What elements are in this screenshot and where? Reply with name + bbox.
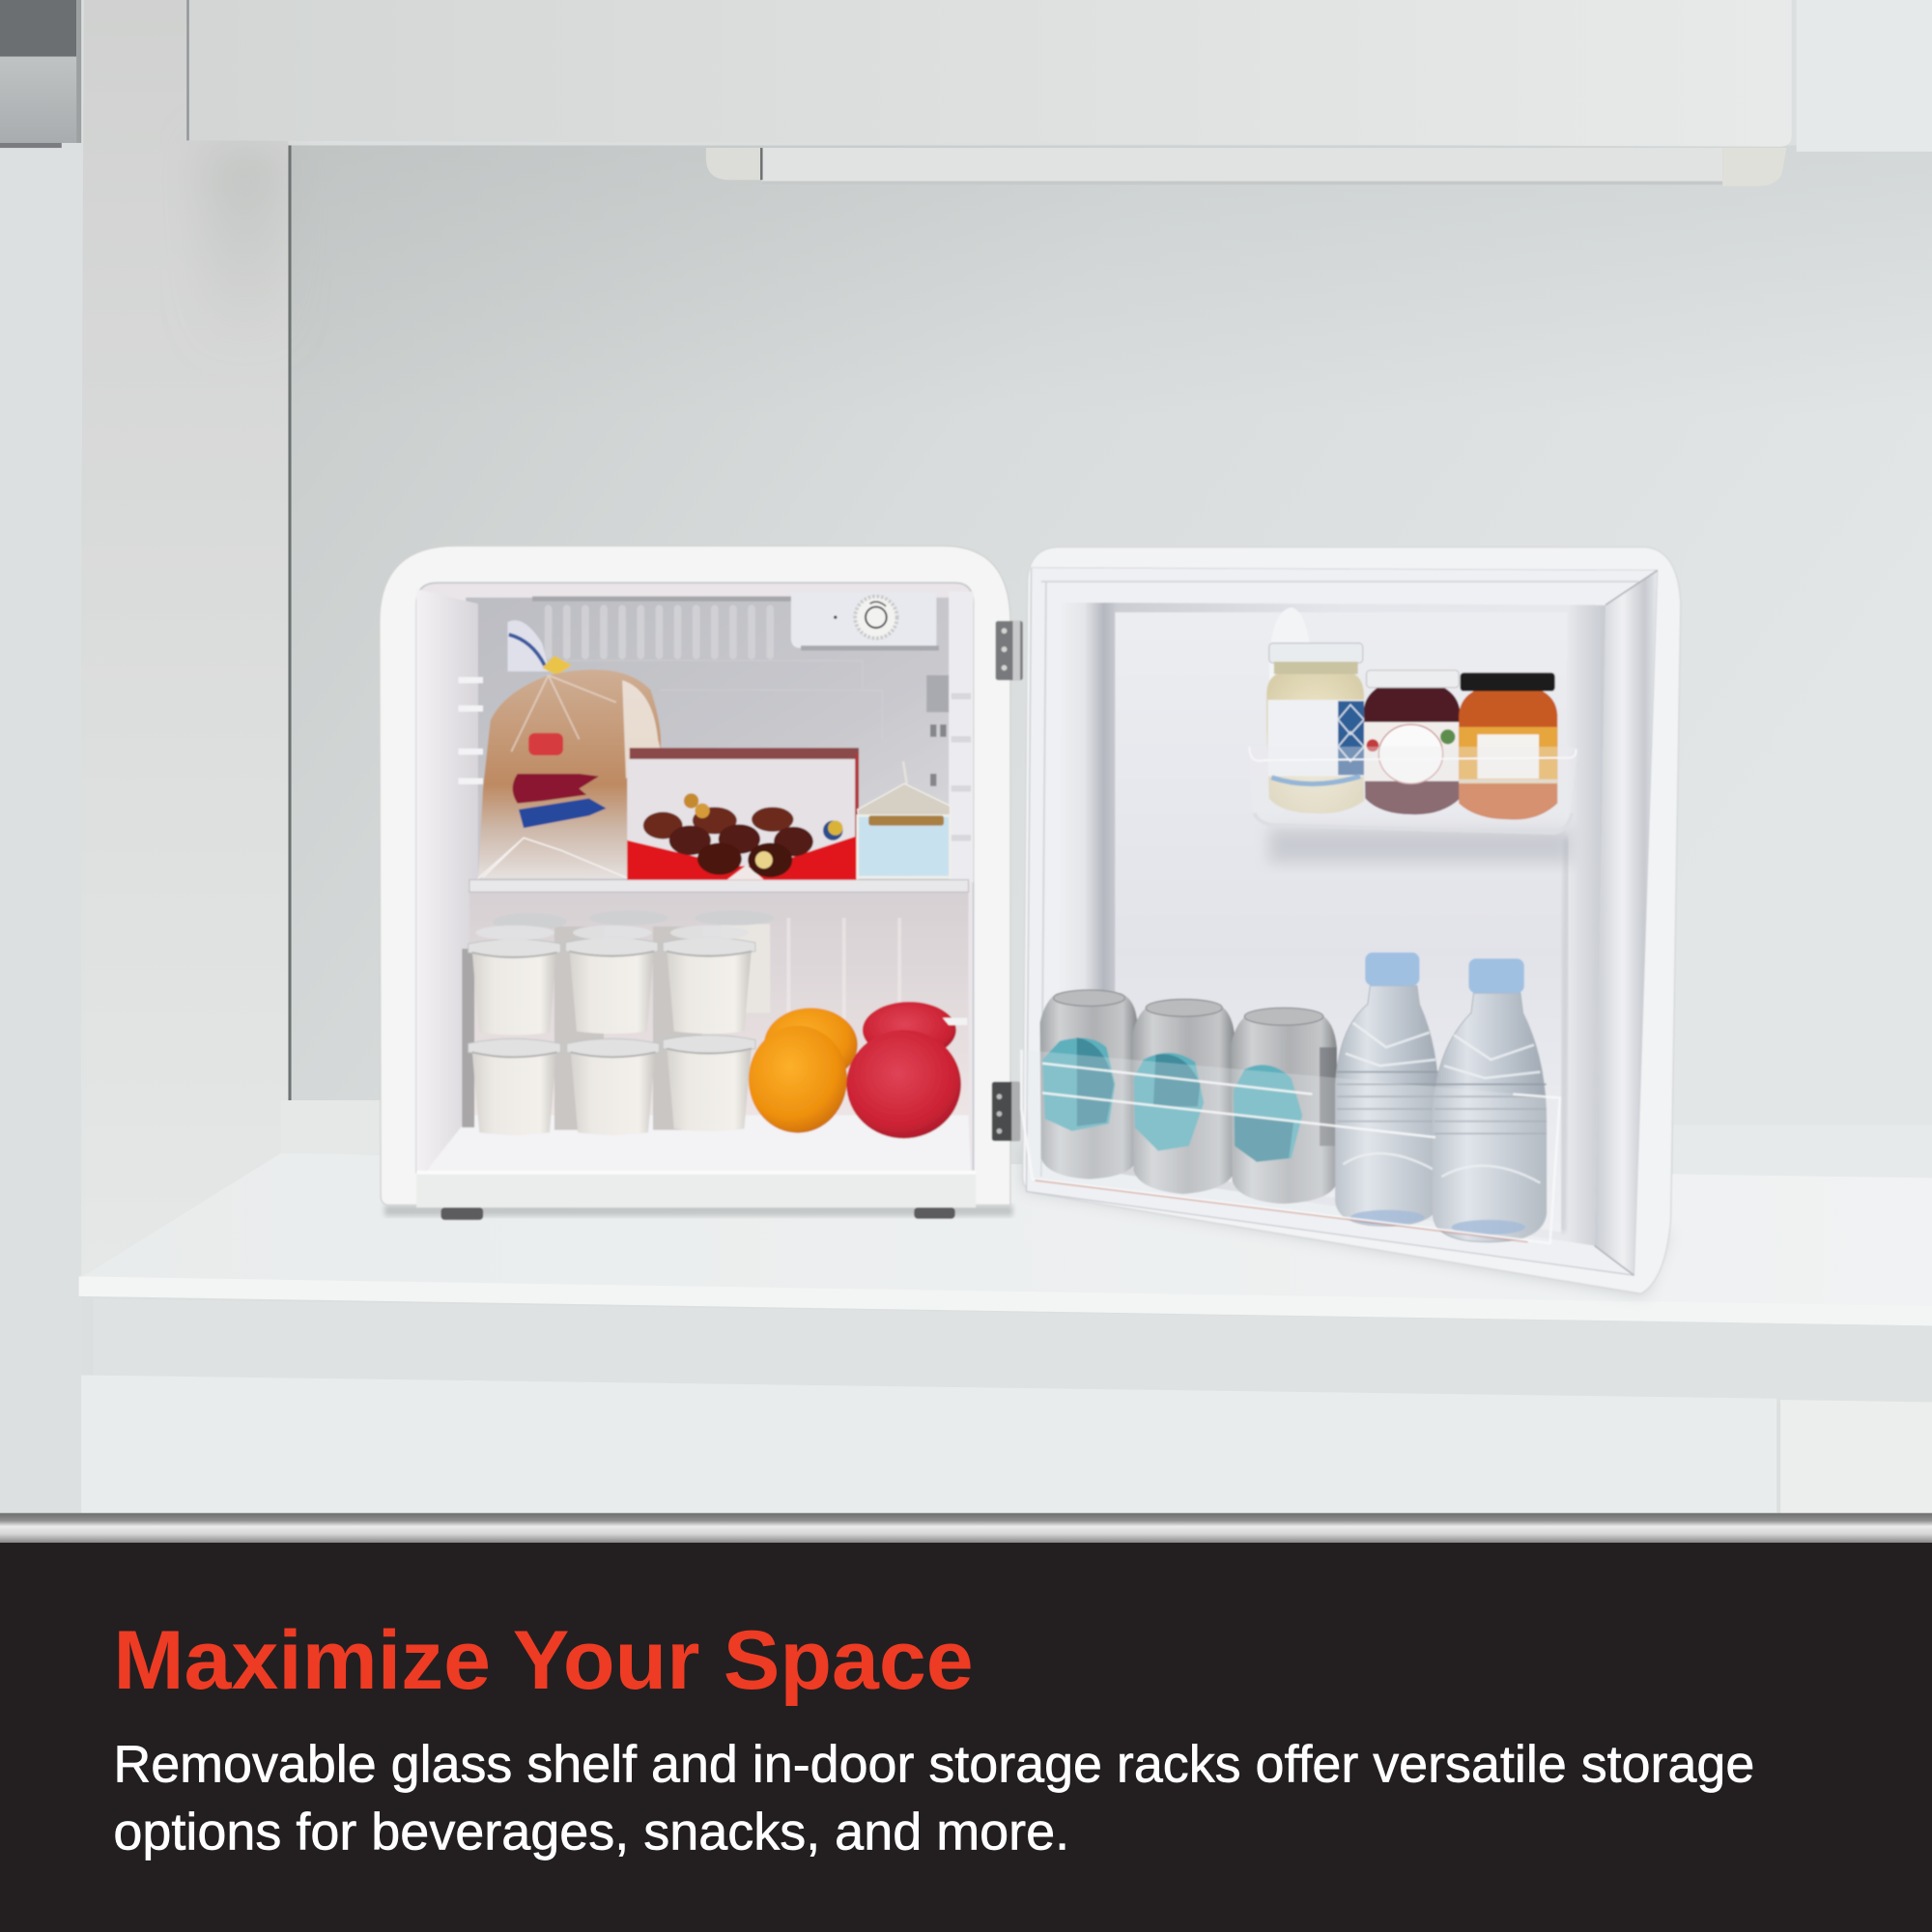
left wall xyxy=(416,589,478,1171)
inner panel right edge highlight xyxy=(1562,838,1567,1233)
oranges xyxy=(749,1008,858,1133)
backsplash ledges xyxy=(281,1100,1932,1181)
upper right wall xyxy=(926,591,974,882)
lower door rack xyxy=(1021,1050,1560,1243)
under-cabinet light xyxy=(706,148,1786,186)
soft shade on left column xyxy=(203,146,288,355)
body text xyxy=(113,1736,1754,1861)
door shell xyxy=(1023,547,1681,1293)
bread label blue xyxy=(519,799,607,828)
can 2 xyxy=(1132,999,1235,1194)
control box with thermostat dial xyxy=(791,593,939,650)
door liner xyxy=(1057,603,1605,1246)
top row xyxy=(469,939,560,1035)
bread label maroon xyxy=(513,774,599,804)
right frame band xyxy=(1595,571,1658,1275)
bread label red xyxy=(528,733,563,755)
outer shell xyxy=(380,546,1010,1205)
right upper cabinet xyxy=(1797,0,1932,152)
upper door rack xyxy=(1249,747,1577,833)
bottle 1 xyxy=(1336,952,1439,1226)
apples xyxy=(846,1002,967,1139)
top-left dark block xyxy=(0,0,81,148)
fridge body xyxy=(380,546,1023,1220)
hinges xyxy=(992,621,1023,1141)
upper cabinet xyxy=(188,0,1792,147)
fridge door xyxy=(1021,547,1681,1293)
milk carton xyxy=(858,761,950,877)
lower back panel xyxy=(469,892,969,1132)
left column xyxy=(79,0,288,1282)
can 3 xyxy=(1231,1008,1337,1204)
upper rack shadow xyxy=(1269,828,1571,863)
wall corner line xyxy=(288,146,292,1104)
upper bulge xyxy=(1269,608,1311,739)
bottom row xyxy=(469,1038,560,1135)
chocolate box xyxy=(627,748,859,880)
orange jam jar xyxy=(1459,672,1557,820)
soda cans xyxy=(1040,990,1337,1204)
evaporator ribs xyxy=(542,609,882,739)
countertop xyxy=(79,1153,1932,1309)
bottom lip xyxy=(416,1171,976,1208)
bread loaf in bag xyxy=(478,620,661,878)
metallic divider bar xyxy=(0,1513,1932,1543)
upper back panel xyxy=(466,598,958,884)
drawers xyxy=(81,1375,1932,1513)
shelf xyxy=(469,880,969,892)
yogurt cups xyxy=(462,911,774,1135)
lid domes xyxy=(475,925,750,940)
can 1 xyxy=(1040,990,1137,1179)
cabinet front xyxy=(94,1298,1932,1405)
back row cups xyxy=(462,911,774,1130)
dark caption panel xyxy=(0,1543,1932,1932)
cavity floor xyxy=(426,1115,971,1171)
top frame band xyxy=(1032,568,1658,605)
cavity xyxy=(416,582,974,1173)
side ribs xyxy=(458,680,483,781)
mayonnaise jar xyxy=(1266,643,1364,813)
feet xyxy=(441,1208,955,1220)
bottle 2 xyxy=(1433,958,1547,1242)
back wall xyxy=(288,146,1932,1186)
heading: Maximize Your Space xyxy=(113,1613,974,1707)
berry jam jar xyxy=(1364,670,1460,814)
water bottles xyxy=(1336,952,1547,1242)
shadows on counter xyxy=(384,1146,1669,1296)
body line 1: Removable glass shelf and in-door storage racks offer versatile storage xyxy=(113,1736,1754,1793)
body line 2: options for beverages, snacks, and more. xyxy=(113,1804,1069,1861)
inner flat panel xyxy=(1115,612,1567,1233)
far-left panel xyxy=(0,151,81,1513)
gasket frame xyxy=(1026,568,1658,1275)
